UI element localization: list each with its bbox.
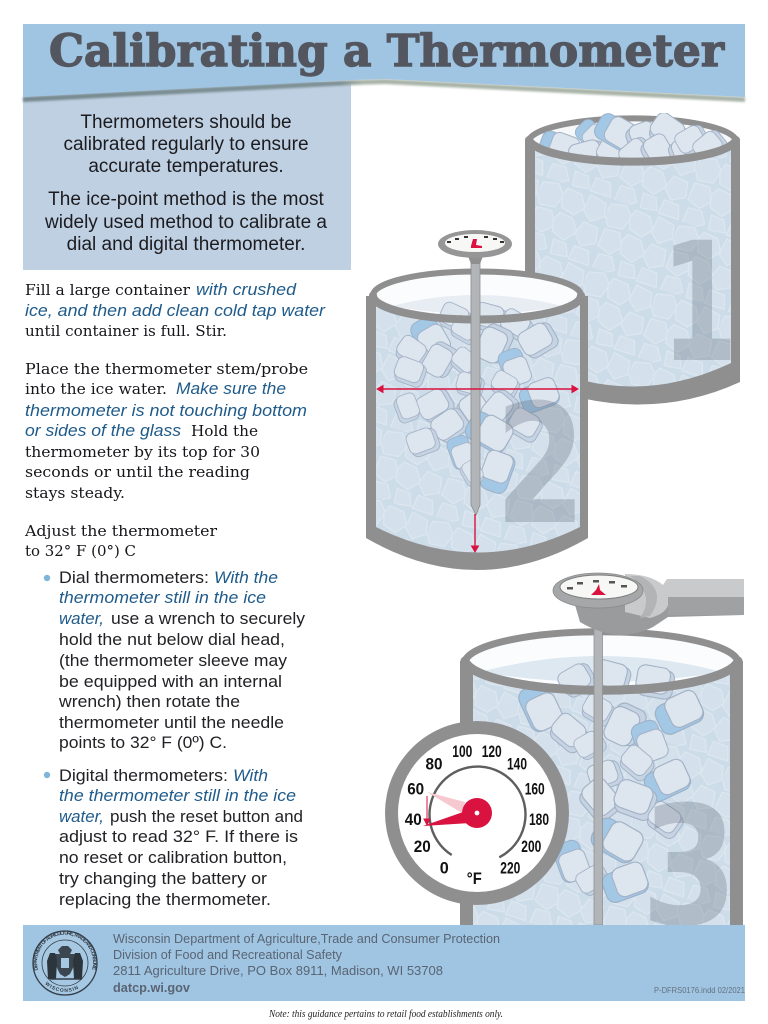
footer address: Wisconsin Department of Agriculture,Trade and Consumer Protection <box>113 931 500 946</box>
ice cubes at top of jar 1 <box>539 113 728 158</box>
dial numbers: 180 <box>529 810 549 829</box>
step 2 text: Make sure the <box>176 379 286 398</box>
bullet: dial thermometers: use a wrench to securely <box>111 609 306 628</box>
dial numbers: °F <box>467 869 482 888</box>
bullet: dial thermometers: Dial thermometers: <box>59 568 209 587</box>
step 1 text: until container is full. Stir. <box>25 322 227 340</box>
bullet: digital thermometers: no reset or calibration button, <box>59 848 287 867</box>
dial numbers: 100 <box>452 742 472 761</box>
dial numbers: 120 <box>482 742 502 761</box>
jar 1: container filled with crushed ice <box>525 109 740 405</box>
dial numbers: 80 <box>426 754 442 774</box>
intro text: dial and digital thermometer. <box>67 234 305 255</box>
dial numbers: 60 <box>407 780 424 798</box>
step 2 text: Hold the <box>191 422 258 440</box>
bullet: digital thermometers: water, <box>59 807 104 826</box>
bullet: dial thermometers: With the <box>214 568 278 587</box>
bullet: digital thermometers <box>44 766 303 909</box>
bullet: dial thermometers: water, <box>59 609 104 628</box>
dial numbers: 40 <box>405 810 422 829</box>
step 1 text: ice, and then add clean cold tap water <box>25 301 326 320</box>
bullet: dial thermometers: hold the nut below dial head, <box>59 630 285 649</box>
red indicator arrow <box>424 796 430 825</box>
bullet: digital thermometers: try changing the battery or <box>59 869 267 888</box>
state seal: DEPARTMENT OF AGRICULTURE, TRADE AND CONSUMER PROTECTION <box>34 932 96 970</box>
stem <box>594 625 602 925</box>
step 3 text: Adjust the thermometer <box>24 522 218 540</box>
step 1 text <box>25 280 326 340</box>
bullet: dial thermometers: be equipped with an internal <box>59 672 282 691</box>
bullet: digital thermometers: With <box>233 766 268 785</box>
step 2 text <box>25 360 308 502</box>
needle hub <box>462 798 492 828</box>
bullet: digital thermometers: push the reset button and <box>110 807 303 826</box>
footer address <box>113 931 500 995</box>
intro text: widely used method to calibrate a <box>44 212 327 233</box>
bullet: digital thermometers: replacing the thermometer. <box>59 890 271 909</box>
intro panel background <box>23 82 351 270</box>
ice cubes in jar 3 <box>516 658 707 905</box>
state seal: WISCONSIN <box>46 981 78 992</box>
step 2 text: into the ice water. <box>25 380 167 398</box>
red arrows <box>377 386 578 552</box>
intro text: Thermometers should be <box>80 112 292 133</box>
bullet: dial thermometers: wrench) then rotate the <box>58 692 240 711</box>
step 1 text: Fill a large container <box>25 281 191 299</box>
number 3: 3 <box>641 771 738 963</box>
intro text: accurate temperatures. <box>88 156 284 177</box>
step 2 text: seconds or until the reading <box>25 463 250 481</box>
thermometer <box>438 230 512 515</box>
intro text: calibrated regularly to ensure <box>63 134 309 155</box>
step 3 text <box>24 522 218 560</box>
footer address: 2811 Agriculture Drive, PO Box 8911, Madison, WI 53708 <box>113 963 443 978</box>
dial numbers: 0 <box>440 858 449 878</box>
bullet: dial thermometers: points to 32° F (0º) C. <box>59 733 227 752</box>
gauge scale <box>430 767 526 857</box>
bullet: digital thermometers: adjust to read 32° F. If there is <box>59 827 298 846</box>
jar 3: adjusting with wrench <box>460 573 744 963</box>
state seal <box>32 930 98 996</box>
dial numbers: 20 <box>414 837 431 856</box>
document code: P-DFRS0176.indd 02/2021 <box>654 985 745 995</box>
step 3 text: to 32° F (0°) C <box>25 542 136 560</box>
dial numbers: 220 <box>500 858 520 878</box>
bullet: digital thermometers: the thermometer still in the ice <box>59 786 296 805</box>
step 2 text: or sides of the glass <box>25 421 182 440</box>
step 2 text: thermometer is not touching bottom <box>25 401 307 420</box>
footer address: Division of Food and Recreational Safety <box>113 947 342 962</box>
dial numbers: 160 <box>525 780 545 798</box>
step 1 text: with crushed <box>196 280 297 299</box>
number 2: 2 <box>495 369 586 561</box>
ice cubes in jar 2 <box>391 300 562 496</box>
header banner <box>23 24 745 102</box>
title: Calibrating a Thermometer <box>49 26 725 77</box>
intro text: The ice-point method is the most <box>48 189 325 210</box>
dial numbers <box>405 742 549 888</box>
dial numbers: 140 <box>507 754 527 774</box>
bullet: dial thermometers: thermometer still in the ice <box>59 588 266 607</box>
bullet: digital thermometers: Digital thermometers: <box>59 766 228 785</box>
enlarged dial gauge <box>385 721 569 905</box>
dial numbers: 200 <box>521 837 541 856</box>
thermometer dial head <box>553 573 643 608</box>
wrench <box>575 574 744 635</box>
footnote: Note: this guidance pertains to retail food establishments only. <box>268 1009 503 1020</box>
step 2 text: Place the thermometer stem/probe <box>25 360 308 378</box>
footer address: datcp.wi.gov <box>113 980 191 995</box>
bullet: dial thermometers <box>44 568 306 752</box>
intro text <box>44 112 327 255</box>
jar 2: thermometer in ice water <box>366 230 588 570</box>
red needle <box>423 811 470 826</box>
step 2 text: stays steady. <box>25 484 125 502</box>
pink ghost needle <box>427 792 465 813</box>
step 2 text: thermometer by its top for 30 <box>25 443 260 461</box>
bullet: dial thermometers: (the thermometer sleeve may <box>59 651 288 670</box>
bullet: dial thermometers: thermometer until the needle <box>59 713 284 732</box>
